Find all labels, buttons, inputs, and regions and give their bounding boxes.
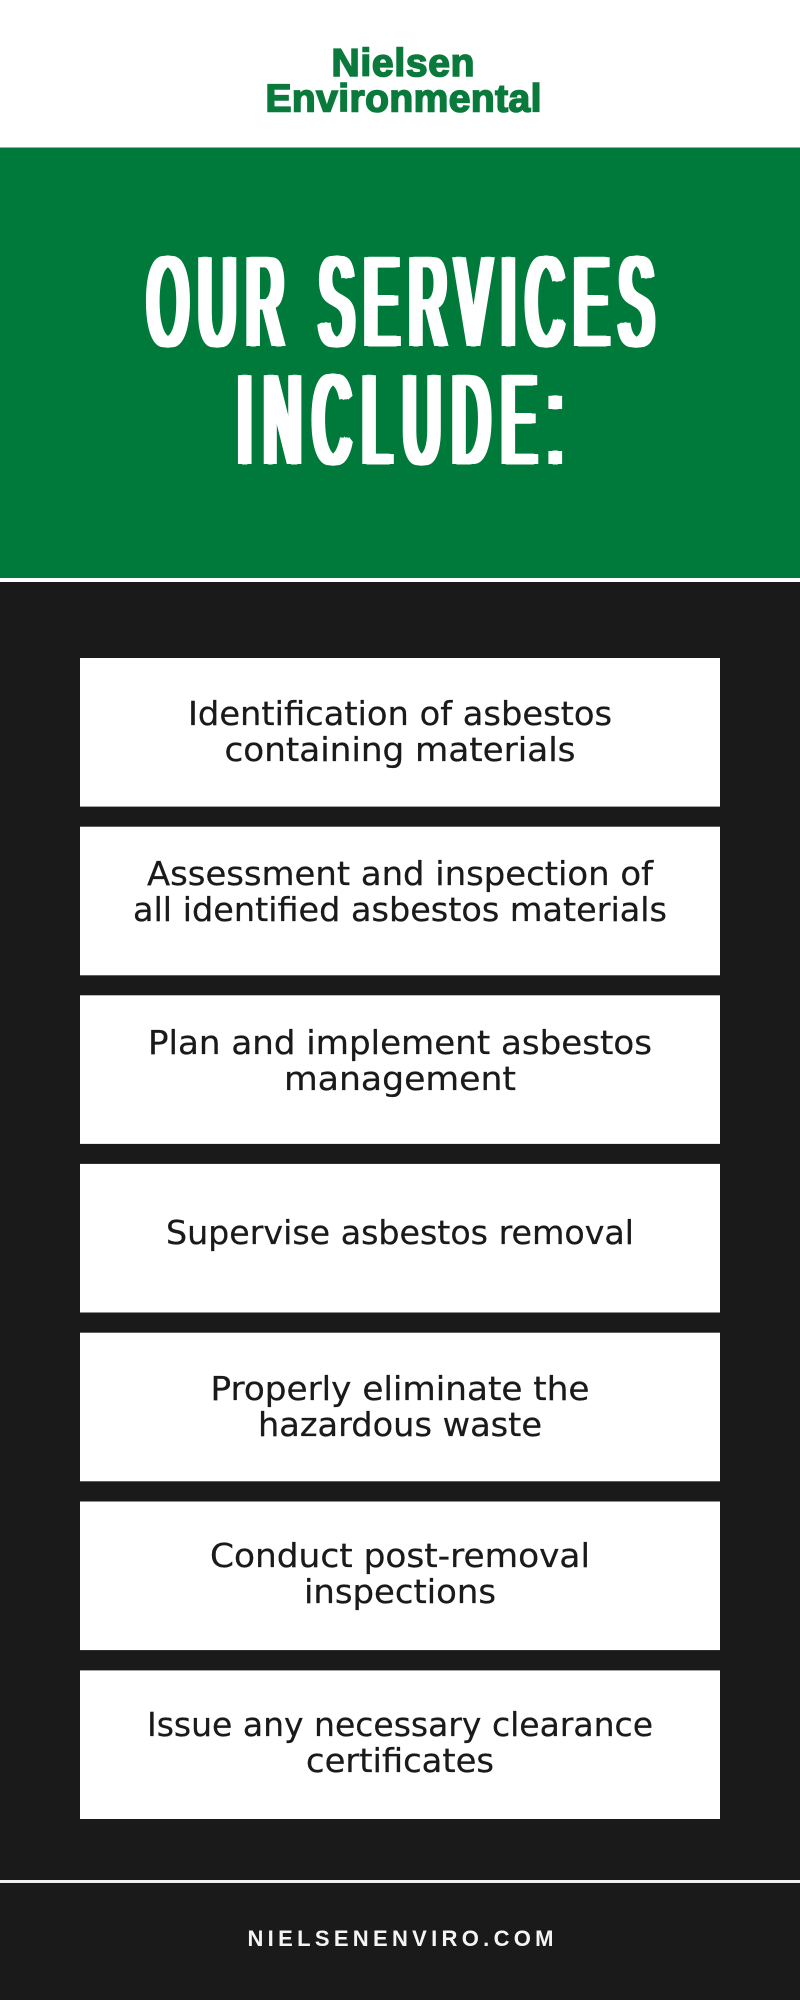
card 7 text: Issue any necessary clearance [147, 1705, 653, 1744]
logo wordmark [266, 42, 542, 120]
card 5 text: Properly eliminate the [210, 1369, 590, 1408]
service card 3 [80, 995, 720, 1144]
logo wordmark: Environmental [266, 78, 542, 120]
card 6 text: inspections [304, 1572, 496, 1611]
service card 7 [80, 1670, 720, 1819]
title heading: INCLUDE: [238, 348, 574, 492]
card 2 text: all identified asbestos materials [133, 890, 667, 929]
card 2 text: Assessment and inspection of [147, 854, 654, 893]
title heading [146, 230, 664, 492]
service card 2 [80, 827, 720, 975]
service card 6 [80, 1502, 720, 1650]
card 6 text: Conduct post-removal [210, 1536, 590, 1575]
title heading: OUR SERVICES [148, 230, 664, 374]
footer panel [0, 1883, 800, 2000]
card 1 text: Identification of asbestos [188, 694, 612, 733]
card 1 text: containing materials [224, 730, 576, 769]
title panel [0, 148, 800, 578]
services panel [0, 582, 800, 1880]
card 3 text: Plan and implement asbestos [148, 1023, 652, 1062]
header panel with logo [0, 0, 800, 148]
card 3 text: management [284, 1059, 516, 1098]
card 4 text: Supervise asbestos removal [166, 1213, 634, 1252]
footer website: NIELSENENVIRO.COM [248, 1926, 554, 1951]
card 5 text: hazardous waste [258, 1405, 542, 1444]
service card 4 [80, 1164, 720, 1312]
service card 1 [80, 658, 720, 807]
card 7 text: certificates [306, 1741, 494, 1780]
logo wordmark: Nielsen [332, 42, 474, 85]
service card 5 [80, 1333, 720, 1481]
